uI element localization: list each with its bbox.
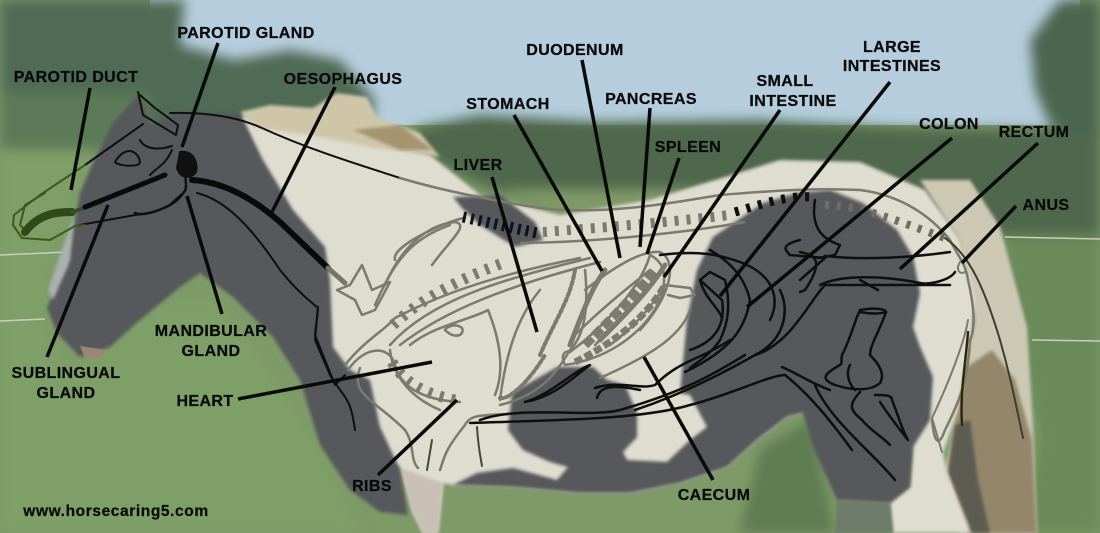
tree right <box>1030 0 1100 140</box>
tail bones and hind outline <box>932 238 1023 452</box>
line: liver <box>492 177 537 332</box>
sublingual gland tube <box>25 175 165 232</box>
label: duodenum: DUODENUM <box>526 42 624 59</box>
grass lighter left <box>0 150 360 533</box>
label: oesophagus: OESOPHAGUS <box>284 71 402 88</box>
sky <box>150 0 1080 125</box>
line: rectum <box>900 143 1038 269</box>
label: sublingual gland: SUBLINGUAL <box>12 365 120 382</box>
fence wires <box>0 237 1100 341</box>
hind leg bones <box>826 309 908 445</box>
leader lines <box>47 43 1038 480</box>
spine vertebrae <box>463 197 945 243</box>
front leg shade <box>400 468 443 533</box>
label: mandibular gland: MANDIBULAR <box>155 323 267 340</box>
line: caecum <box>644 357 713 480</box>
line: oesophagus <box>272 87 335 212</box>
hindgut and pelvis <box>470 200 955 480</box>
chest lines <box>427 427 482 470</box>
heavy stomach and liver shading <box>500 265 665 398</box>
line: spleen <box>647 158 679 254</box>
line: parotid duct <box>71 88 90 190</box>
label: spleen: SPLEEN <box>655 139 721 156</box>
mane <box>240 93 440 157</box>
line: mandibular gland <box>187 196 222 314</box>
head and neck <box>47 93 408 515</box>
labels: GLAND <box>182 343 240 360</box>
muzzle outline <box>13 165 85 240</box>
label: stomach: STOMACH <box>466 96 550 113</box>
label: heart: HEART <box>176 393 234 410</box>
muzzle blaze <box>48 215 74 300</box>
labels: INTESTINE <box>749 93 837 110</box>
label: anus: ANUS <box>1023 197 1069 214</box>
label: rectum: RECTUM <box>999 124 1069 141</box>
withers <box>453 195 543 247</box>
label: large intestines: LARGE <box>863 39 921 56</box>
line: ribs <box>378 400 457 475</box>
label: small intestine: SMALL <box>756 73 814 90</box>
line: anus <box>962 206 1016 263</box>
label: ribs: RIBS <box>352 478 392 495</box>
dark patches <box>47 93 933 515</box>
label: parotid duct: PAROTID DUCT <box>14 69 138 86</box>
rib ladders <box>392 263 503 400</box>
website credit: www.horsecaring5.com <box>22 503 209 520</box>
label: parotid gland: PAROTID GLAND <box>177 25 315 42</box>
grass strip behind back <box>500 190 700 214</box>
line: duodenum <box>582 60 620 258</box>
anatomy diagram <box>13 92 1023 480</box>
belly and hindquarters <box>453 190 933 503</box>
parotid gland <box>177 152 197 177</box>
line: small intestine <box>664 110 780 277</box>
back and thorax line drawing <box>337 178 974 470</box>
labels: INTESTINES <box>843 58 941 75</box>
lower hind leg shade <box>835 500 893 533</box>
line: colon <box>747 138 952 307</box>
hedge right <box>415 115 1100 235</box>
horse body <box>47 93 1037 533</box>
light coat <box>240 115 975 533</box>
line: pancreas <box>640 108 650 247</box>
mane streak <box>353 125 433 150</box>
line: heart <box>238 362 432 399</box>
line: parotid gland <box>182 43 218 147</box>
hedge left <box>0 92 150 150</box>
line: stomach <box>514 115 602 271</box>
skull and head outline <box>80 92 400 430</box>
label: caecum: CAECUM <box>678 487 750 504</box>
line: large intestines <box>720 82 890 296</box>
tail <box>920 180 1037 533</box>
label: colon: COLON <box>919 116 979 133</box>
line: sublingual gland <box>47 205 108 357</box>
mandibular gland outline <box>135 175 186 214</box>
grass dark under hind arch <box>740 420 835 533</box>
trees left <box>0 0 375 150</box>
label: pancreas: PANCREAS <box>605 91 697 108</box>
grass dark right <box>1000 235 1100 533</box>
labels: GLAND <box>37 385 95 402</box>
label: liver: LIVER <box>453 157 503 174</box>
oesophagus <box>192 180 345 283</box>
